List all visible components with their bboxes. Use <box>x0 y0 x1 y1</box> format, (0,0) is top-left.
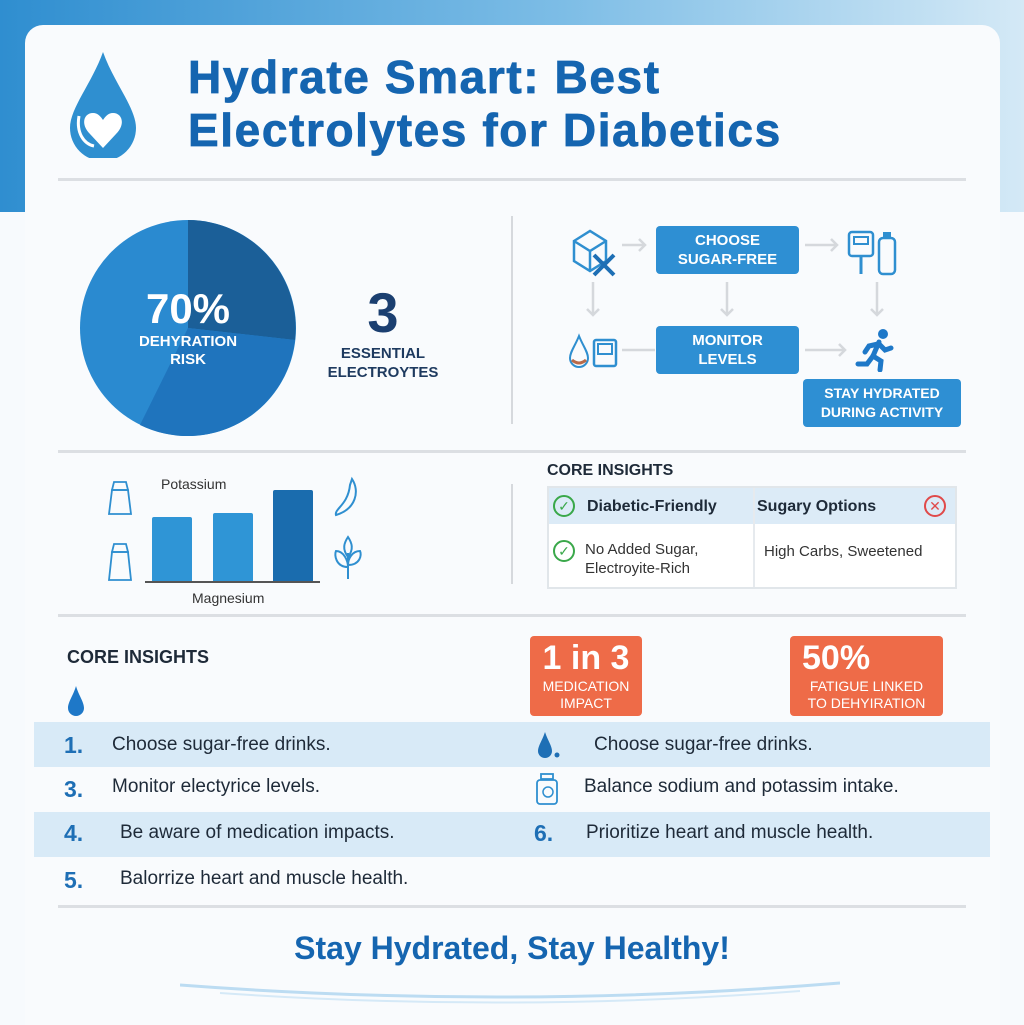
tips list: 1. <box>64 732 83 758</box>
comparison table <box>547 462 957 589</box>
stat: 1 in 3: MEDICATION <box>543 678 629 694</box>
flowchart <box>569 226 961 427</box>
icon: drop <box>68 686 84 716</box>
tips list: Balorrize heart and muscle health. <box>120 868 408 889</box>
comparison table: High Carbs, Sweetened <box>764 543 922 560</box>
box: monitor levels: LEVELS <box>698 351 757 368</box>
comparison table: Diabetic-Friendly <box>587 498 717 515</box>
title: Hydrate Smart: Best <box>188 51 661 103</box>
tips list: Be aware of medication impacts. <box>120 822 395 843</box>
pie label <box>139 285 237 368</box>
icon: sugar cube crossed <box>572 230 616 276</box>
decorative wave <box>180 982 840 1004</box>
pie label: 70% <box>146 285 230 332</box>
tips list: Prioritize heart and muscle health. <box>586 822 873 843</box>
stat: 3 electrolytes: 3 <box>367 281 399 344</box>
arrows <box>586 238 884 357</box>
stat: 1 in 3 <box>530 636 642 716</box>
comparison table: ✓ <box>558 543 570 559</box>
pie label: RISK <box>170 351 206 368</box>
stat: 50%: 50% <box>802 639 870 677</box>
box: stay hydrated <box>803 379 961 427</box>
stat: 3 electrolytes: ESSENTIAL <box>341 345 425 362</box>
icon: runner <box>856 329 894 372</box>
bar chart: Potassium <box>161 476 226 492</box>
tips list: Balance sodium and potassim intake. <box>584 776 899 797</box>
tips list: 6. <box>534 820 553 846</box>
heading: core insights: CORE INSIGHTS <box>67 647 209 667</box>
box: monitor levels: MONITOR <box>692 332 763 349</box>
stat: 3 electrolytes: ELECTROYTES <box>328 364 438 381</box>
bar chart <box>108 476 362 606</box>
stat: 1 in 3: IMPACT <box>560 695 612 711</box>
tips list: 4. <box>64 820 83 846</box>
pie label: DEHYRATION <box>139 333 237 350</box>
title <box>188 51 782 156</box>
tips list: Monitor electyrice levels. <box>112 776 320 797</box>
box: choose sugar-free <box>656 226 799 274</box>
box: stay hydrated: STAY HYDRATED <box>824 385 940 401</box>
title: Electrolytes for Diabetics <box>188 104 782 156</box>
tips list <box>64 732 899 893</box>
icon: salt shakers <box>108 481 132 581</box>
bar chart: Magnesium <box>192 590 264 606</box>
icon: drop and monitor <box>569 333 618 368</box>
comparison table: Sugary Options <box>757 498 876 515</box>
box: choose sugar-free: SUGAR-FREE <box>678 251 777 268</box>
icon: banana and leaf <box>334 476 362 579</box>
stat: 50%: TO DEHYIRATION <box>808 695 925 711</box>
top band background <box>0 0 1024 212</box>
tips list: Choose sugar-free drinks. <box>112 734 331 755</box>
box: choose sugar-free: CHOOSE <box>695 232 760 249</box>
stat: 3 electrolytes <box>328 281 438 381</box>
comparison table: CORE INSIGHTS <box>547 462 673 479</box>
comparison table: Electroyite-Rich <box>585 560 690 577</box>
icon: meter and bottle <box>848 230 896 276</box>
pie chart <box>80 220 296 436</box>
box: monitor levels <box>656 326 799 374</box>
footer tagline: Stay Hydrated, Stay Healthy! <box>294 930 730 966</box>
box: stay hydrated: DURING ACTIVITY <box>821 404 943 420</box>
comparison table: ✓ <box>558 498 570 514</box>
stat: 50%: FATIGUE LINKED <box>810 678 923 694</box>
stat: 50% <box>790 636 943 716</box>
tips list: 3. <box>64 776 83 802</box>
list stripes <box>34 722 990 767</box>
icon: drop with heart <box>70 52 136 158</box>
tips list: 5. <box>64 867 83 893</box>
comparison table: No Added Sugar, <box>585 541 698 558</box>
stat: 1 in 3: 1 in 3 <box>543 639 629 677</box>
tips list: Choose sugar-free drinks. <box>594 734 813 755</box>
comparison table: ✕ <box>929 498 941 514</box>
